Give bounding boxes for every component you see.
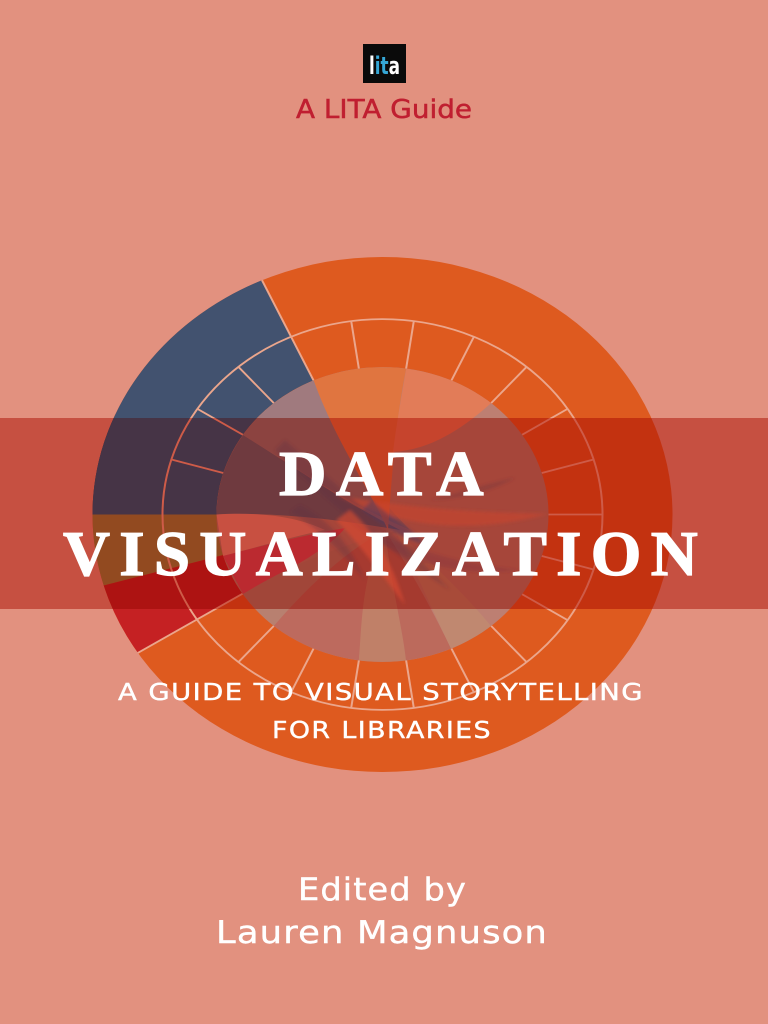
title: VISUALIZATION (63, 519, 707, 589)
blue segment inside band (92, 418, 257, 514)
ribbon: bottom left (244, 570, 287, 626)
editor: Lauren Magnuson (216, 915, 548, 951)
ribbon: bottom right (385, 530, 451, 660)
brown segment (92, 514, 223, 585)
blue segment (92, 280, 314, 514)
ribbon: dark left (216, 435, 400, 530)
subtitle (118, 680, 644, 744)
title: DATA (279, 439, 493, 509)
title (63, 439, 707, 589)
chord streaks (275, 440, 548, 605)
ribbon: bottom (274, 530, 385, 660)
ribbon: mauve (243, 380, 410, 530)
editor (216, 872, 548, 951)
series label: A LITA Guide (296, 95, 472, 125)
ribbon: red (223, 528, 345, 594)
red segment (104, 555, 242, 652)
icon: lita logo: lita (369, 52, 400, 80)
ring dividers (138, 280, 602, 710)
ribbon: bottom right tan (432, 609, 490, 648)
icon: lita logo (363, 44, 406, 83)
ribbon: brown (216, 514, 325, 556)
ribbon: bottom tan (359, 606, 406, 662)
ribbon: light orange (393, 369, 491, 452)
subtitle: A GUIDE TO VISUAL STORYTELLING (118, 680, 644, 706)
chord diagram centre (210, 360, 555, 670)
ribbon: orange (314, 367, 406, 530)
editor: Edited by (298, 872, 467, 908)
chord diagram outer ring (92, 257, 672, 772)
subtitle: FOR LIBRARIES (272, 718, 492, 744)
title band (0, 418, 768, 609)
